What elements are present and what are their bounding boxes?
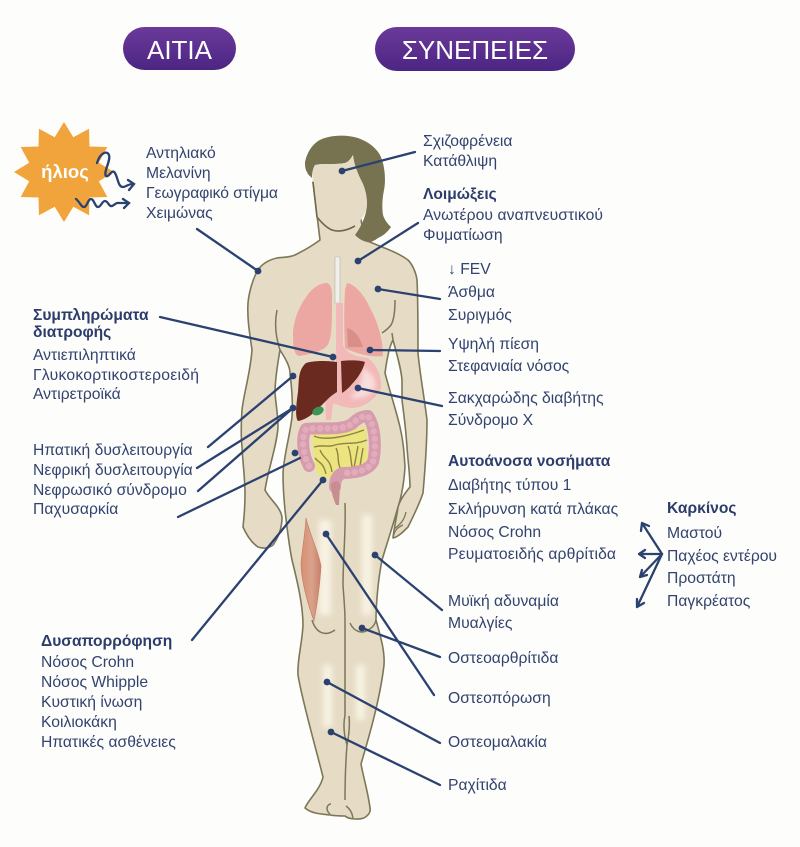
body figure [241, 136, 427, 819]
heading: causes: ΑΙΤΙΑ [147, 35, 213, 65]
small intestine [312, 426, 368, 479]
hair [305, 136, 391, 242]
causes: supplements text: διατροφής [33, 324, 111, 341]
bones [319, 515, 372, 727]
consequences: autoimmune text: Ρευματοειδής αρθρίτιδα [448, 546, 616, 563]
consequences: musculoskeletal text: Μυϊκή αδυναμία [448, 593, 559, 610]
hand fingers [393, 512, 406, 538]
causes: supplements text: Αντιρετροϊκά [33, 386, 121, 403]
causes: organ dysfunction text: Νεφρωσικό σύνδρομο [33, 482, 187, 499]
causes: malabsorption text: Ηπατικές ασθένειες [41, 734, 176, 751]
consequences: cancer text: Προστάτη [667, 570, 736, 587]
muscle [301, 518, 321, 621]
consequences: cancer text: Καρκίνος [667, 500, 736, 517]
consequences: respiratory and cardiac text: Σακχαρώδης διαβήτης [448, 390, 604, 407]
consequences: musculoskeletal text: Μυαλγίες [448, 615, 513, 632]
consequences: cancer text: Παγκρέατος [667, 593, 751, 610]
liver [296, 360, 365, 421]
causes: malabsorption text: Κοιλιοκάκη [41, 714, 117, 731]
causes: malabsorption text: Κυστική ίνωση [41, 694, 142, 711]
icon: sun [14, 122, 134, 222]
chest and thigh lines [276, 300, 395, 818]
causes: organ dysfunction text: Παχυσαρκία [33, 501, 118, 518]
consequences: cancer text [667, 500, 777, 610]
lungs [293, 283, 383, 356]
causes: sun text: Μελανίνη [146, 165, 211, 182]
causes: sun text: Αντηλιακό [146, 145, 216, 162]
consequences: autoimmune text [448, 453, 619, 563]
consequences: autoimmune text: Νόσος Crohn [448, 524, 541, 541]
consequences: autoimmune text: Αυτοάνοσα νοσήματα [448, 453, 611, 470]
consequences: mental and infection text: Σχιζοφρένεια [423, 133, 512, 150]
consequences: musculoskeletal text: Οστεομαλακία [448, 734, 547, 751]
connector lines [160, 152, 442, 785]
consequences: musculoskeletal text: Οστεοαρθρίτιδα [448, 650, 558, 667]
trachea [335, 257, 340, 303]
consequences: musculoskeletal text: Ραχίτιδα [448, 777, 507, 794]
consequences: mental and infection text: Φυματίωση [423, 227, 503, 244]
causes: malabsorption text: Δυσαπορρόφηση [41, 633, 172, 650]
consequences: cancer text: Παχέος εντέρου [667, 548, 777, 565]
gallbladder [311, 405, 325, 417]
causes: organ dysfunction text: Ηπατική δυσλειτουργία [33, 442, 193, 459]
consequences: respiratory and cardiac text: Άσθμα [448, 284, 495, 301]
causes: supplements text: Αντιεπιληπτικά [33, 347, 136, 364]
causes: organ dysfunction text [33, 442, 193, 518]
consequences: respiratory and cardiac text: ↓ FEV [448, 261, 491, 278]
heading: consequences [375, 27, 575, 71]
causes: organ dysfunction text: Νεφρική δυσλειτουργία [33, 462, 193, 479]
consequences: autoimmune text: Διαβήτης τύπου 1 [448, 477, 571, 494]
consequences: respiratory and cardiac text: Στεφανιαία νόσος [448, 358, 570, 375]
causes: supplements text: Συμπληρώματα [33, 307, 149, 324]
body silhouette [241, 182, 427, 819]
causes: malabsorption text: Νόσος Crohn [41, 654, 134, 671]
jaw line [313, 182, 355, 231]
consequences: mental and infection text: Λοιμώξεις [423, 186, 497, 203]
consequences: cancer text: Μαστού [667, 525, 722, 542]
causes: sun text: Χειμώνας [146, 205, 213, 222]
icon: sun: ήλιος [41, 161, 89, 182]
consequences: musculoskeletal text [448, 593, 559, 794]
heading: causes [123, 27, 236, 70]
face [313, 155, 367, 232]
consequences: respiratory and cardiac text: Σύνδρομο Χ [448, 412, 534, 429]
consequences: mental and infection text: Κατάθλιψη [423, 153, 497, 170]
consequences: respiratory and cardiac text: Υψηλή πίεση [448, 336, 539, 353]
causes: supplements text: Γλυκοκορτικοστεροειδή [33, 367, 199, 384]
colon [303, 416, 375, 505]
causes: malabsorption text [41, 633, 176, 751]
consequences: mental and infection text [423, 133, 603, 244]
consequences: mental and infection text: Ανωτέρου αναπνευστικού [423, 207, 603, 224]
causes: malabsorption text: Νόσος Whipple [41, 674, 148, 691]
arrows: cancer [637, 523, 662, 607]
causes: sun text: Γεωγραφικό στίγμα [146, 185, 278, 202]
consequences: respiratory and cardiac text: Συριγμός [448, 307, 512, 324]
consequences: respiratory and cardiac text [448, 261, 604, 429]
consequences: musculoskeletal text: Οστεοπόρωση [448, 690, 551, 707]
esophagus and stomach [325, 303, 381, 420]
heading: consequences: ΣΥΝΕΠΕΙΕΣ [402, 35, 548, 65]
causes: supplements text [33, 307, 199, 403]
consequences: autoimmune text: Σκλήρυνση κατά πλάκας [448, 501, 619, 518]
causes: sun text [146, 145, 278, 222]
